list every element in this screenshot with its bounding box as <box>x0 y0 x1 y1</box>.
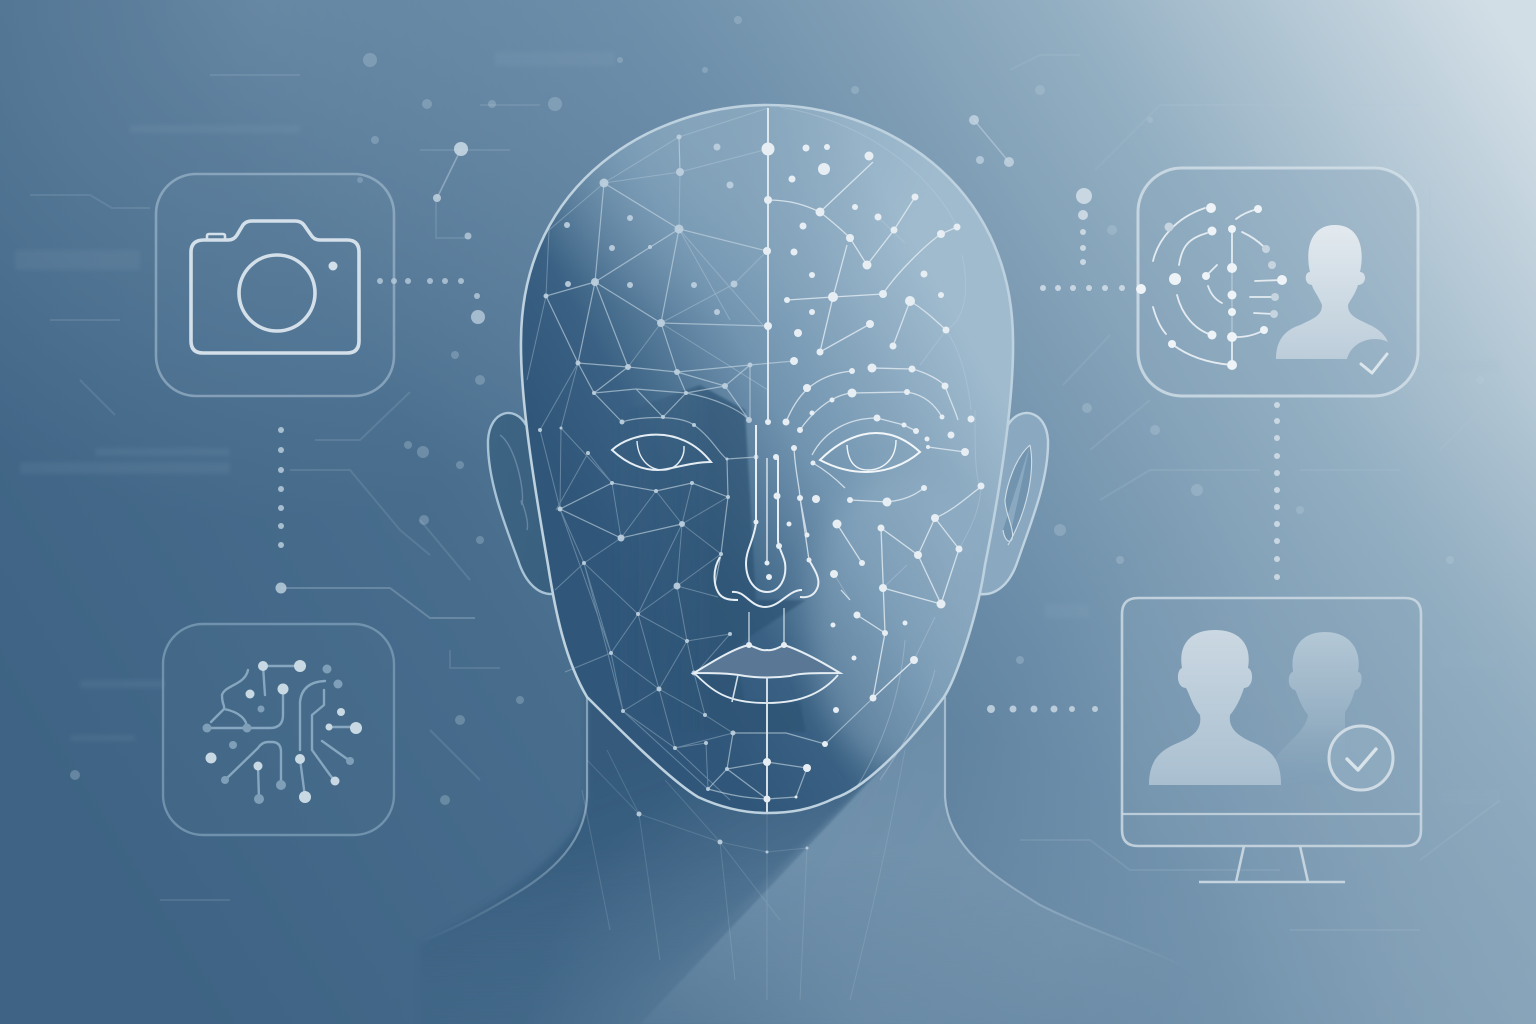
head <box>515 100 1013 854</box>
face mesh: right and centre nodes <box>754 142 984 802</box>
icon: verified check badge <box>1329 726 1393 790</box>
lips <box>694 608 840 703</box>
icon: camera <box>191 221 359 353</box>
connector: camera to face <box>377 278 485 324</box>
neck outline left <box>425 697 587 940</box>
panel: identity match monitor <box>1122 598 1421 882</box>
connector: scan panel to face <box>1040 188 1125 291</box>
connector: scan panel to monitor <box>1274 402 1280 580</box>
neck mesh <box>582 750 905 1000</box>
panel: neural circuit <box>163 624 394 835</box>
face mesh: left faint lines <box>527 107 981 800</box>
connector: camera to circuit <box>276 427 286 594</box>
icon: front person <box>1149 630 1281 785</box>
nose <box>714 425 818 607</box>
face mesh: centre line <box>767 108 768 813</box>
shading: crown of head <box>558 106 872 264</box>
right ear <box>980 413 1048 594</box>
shading: nose and mouth shadow <box>656 384 804 732</box>
icon: back person <box>1272 632 1362 785</box>
panel: camera <box>156 174 394 396</box>
left eye <box>612 435 711 470</box>
connector: face to monitor <box>987 705 1098 713</box>
network nodes upper right <box>969 115 1014 167</box>
torso and neck <box>460 697 1155 1024</box>
shading: right cheek glow <box>805 486 972 770</box>
face mesh: right constellations <box>768 162 981 698</box>
head outline <box>521 105 1013 813</box>
neck outline right <box>945 697 1180 965</box>
panel: face scan match <box>1136 168 1418 396</box>
right eye <box>820 433 920 472</box>
icon: circuit <box>202 660 362 804</box>
face mesh: left nodes <box>538 134 808 854</box>
network nodes upper left <box>433 142 472 240</box>
monitor stand <box>1199 846 1345 882</box>
icon: verified person <box>1276 225 1388 373</box>
left ear <box>488 413 553 594</box>
icon: scan pattern <box>1136 203 1287 370</box>
face mesh: left bright lines <box>546 137 914 799</box>
